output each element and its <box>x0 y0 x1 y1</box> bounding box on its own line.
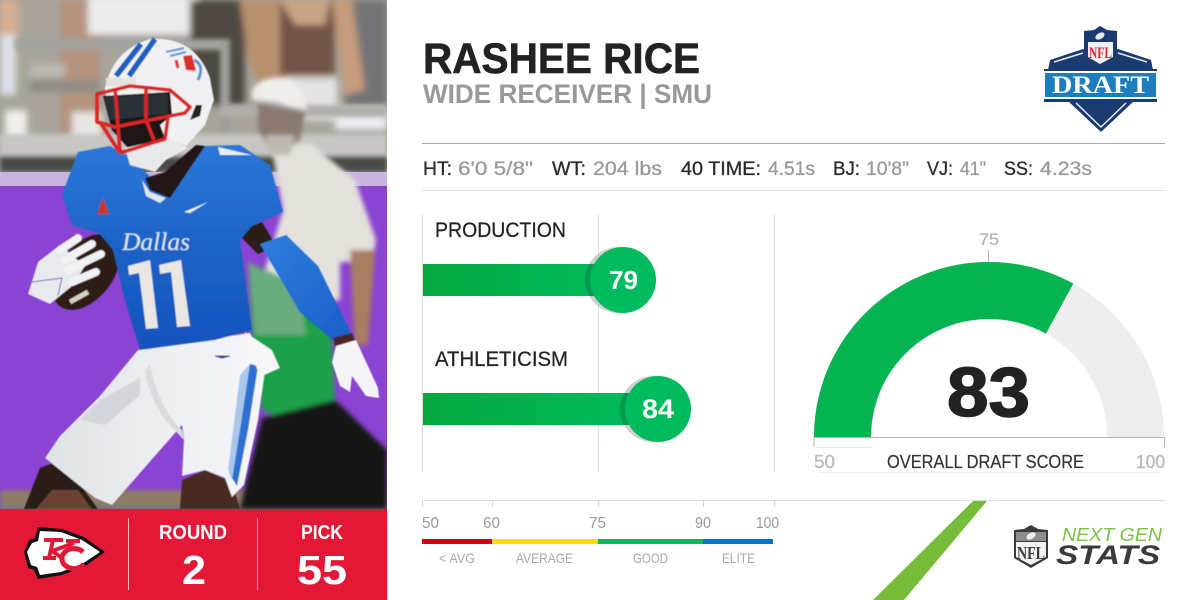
draft wordmark: DRAFT <box>1052 72 1149 99</box>
football <box>54 234 118 310</box>
measurables row: 10'8" <box>866 159 909 180</box>
stats wordmark: STATS <box>1056 540 1160 570</box>
production bar <box>423 219 656 313</box>
measurables row: WT: <box>552 159 586 180</box>
team banner <box>0 509 387 600</box>
red facemask <box>97 86 190 153</box>
gauge score: 83 <box>947 353 1030 431</box>
NFL shield icon <box>1014 525 1048 568</box>
scale color bar <box>422 539 773 544</box>
jersey wordmark: Dallas <box>121 229 190 256</box>
gauge value arc <box>814 262 1073 437</box>
player pants <box>45 332 280 505</box>
position and school: WIDE RECEIVER | SMU <box>423 79 712 109</box>
photo background: stands and spectators <box>0 0 387 509</box>
scale numbers: 60 <box>483 515 500 532</box>
rule lines <box>422 142 1165 144</box>
shield: NFL <box>1089 45 1112 62</box>
measurables row: 40 TIME: <box>681 159 761 180</box>
scale labels: AVERAGE <box>516 550 573 566</box>
scale numbers: 90 <box>695 515 711 532</box>
scale labels: < AVG <box>439 550 475 566</box>
gauge 75 marker: 75 <box>979 230 999 249</box>
production bar: PRODUCTION <box>435 219 566 242</box>
Next Gen Stats logo <box>1014 525 1163 570</box>
scale labels: GOOD <box>633 550 668 566</box>
scale numbers: 50 <box>422 515 439 532</box>
helmet <box>97 39 214 172</box>
scale labels <box>439 550 755 566</box>
round: ROUND <box>159 522 227 544</box>
gauge axis <box>814 438 1164 447</box>
gauge labels: 50 <box>814 452 835 472</box>
Chiefs arrowhead logo <box>24 527 105 579</box>
production bar: 79 <box>609 265 638 295</box>
round <box>159 522 227 593</box>
green diagonal accent <box>873 501 987 600</box>
measurables row: 4.23s <box>1040 159 1092 180</box>
scale labels: ELITE <box>722 550 755 566</box>
blurred camera operator <box>240 78 387 509</box>
scale numbers: 75 <box>589 515 606 532</box>
measurables row: 204 lbs <box>593 159 662 180</box>
scale numbers: 100 <box>756 515 779 532</box>
gauge track <box>814 262 1164 437</box>
player left glove <box>28 238 101 304</box>
measurables row: 6'0 5/8" <box>458 159 533 180</box>
player legs <box>24 460 240 509</box>
gauge labels <box>814 452 1165 472</box>
measurables row: HT: <box>423 159 452 180</box>
athleticism bar: 84 <box>642 394 674 424</box>
pick: 55 <box>297 547 347 593</box>
athleticism bar <box>423 348 691 442</box>
gauge labels: OVERALL DRAFT SCORE <box>887 452 1084 472</box>
player arm and sleeve <box>236 222 356 348</box>
pick <box>297 522 347 593</box>
gauge labels: 100 <box>1136 452 1165 472</box>
player name: RASHEE RICE <box>423 35 700 83</box>
overall score gauge <box>814 230 1165 472</box>
measurables row: BJ: <box>833 159 860 180</box>
athleticism bar: ATHLETICISM <box>435 348 568 371</box>
bar chart panel <box>422 214 774 472</box>
gauge 75 marker <box>979 230 999 262</box>
NFL Draft logo <box>1044 26 1157 132</box>
NFL shield icon: NFL <box>1017 543 1045 563</box>
measurables row: 41" <box>960 159 986 180</box>
player jersey <box>62 145 283 350</box>
measurables row <box>423 159 1092 180</box>
player right glove <box>332 340 379 398</box>
next gen wordmark: NEXT GEN <box>1062 525 1163 545</box>
measurables row: VJ: <box>927 159 953 180</box>
round: 2 <box>182 547 206 593</box>
banner dividers <box>128 518 258 590</box>
scale numbers <box>422 515 779 532</box>
pick: PICK <box>301 522 343 544</box>
jersey number <box>128 260 190 329</box>
player figure <box>24 39 379 509</box>
measurables row: 4.51s <box>768 159 815 180</box>
measurables row: SS: <box>1004 159 1033 180</box>
rating scale legend <box>422 500 779 566</box>
player photo panel <box>0 0 387 509</box>
